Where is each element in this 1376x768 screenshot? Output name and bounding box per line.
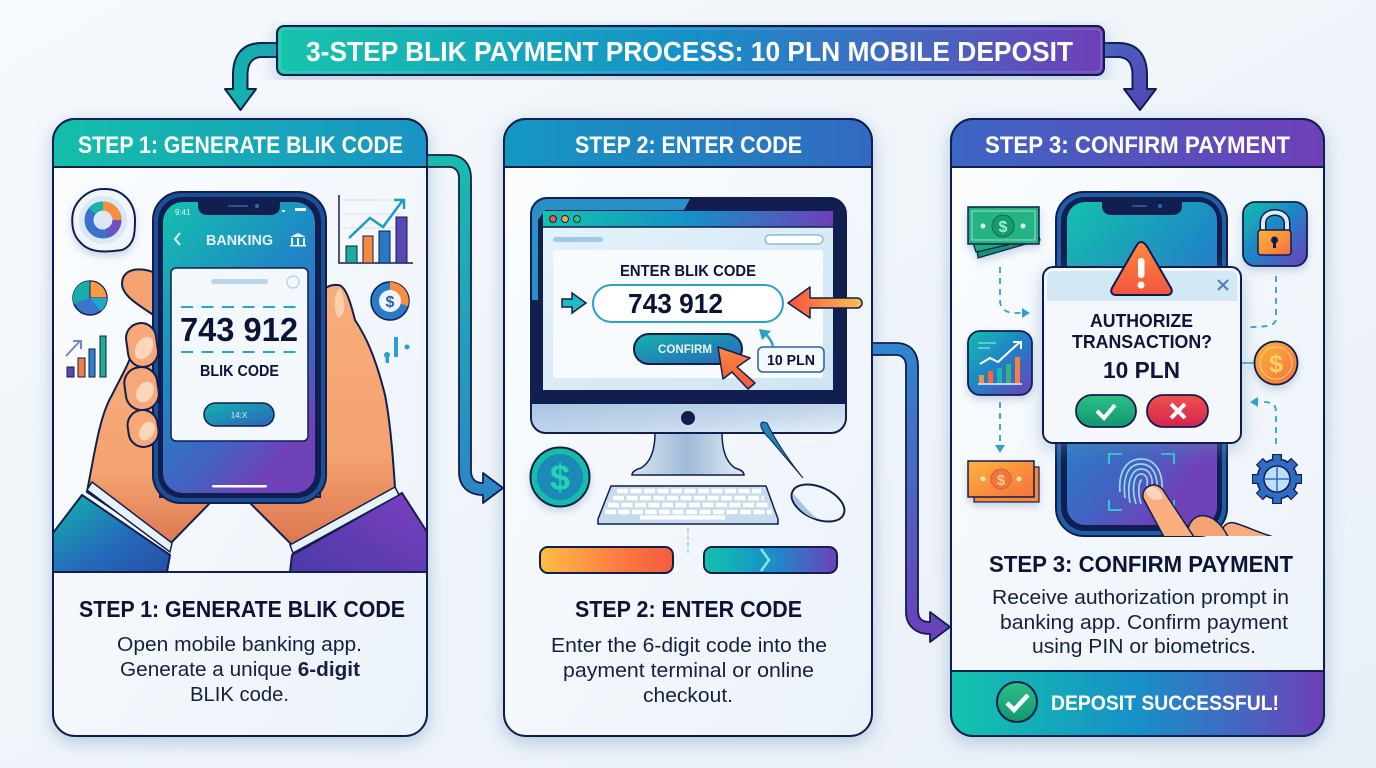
step 2 header: STEP 2: ENTER CODE [575, 132, 802, 159]
keyboard [598, 486, 778, 524]
confirm button [634, 334, 742, 364]
title banner [277, 26, 1104, 75]
step 2 description: Enter the 6-digit code into the [551, 635, 827, 657]
icon: fingerprint [1109, 454, 1174, 510]
arrow: title to step 3 [1100, 43, 1156, 110]
form heading: ENTER BLIK CODE [620, 263, 756, 280]
hand pressing fingerprint [1143, 485, 1274, 537]
step 1 header [53, 119, 427, 167]
cursor [718, 347, 755, 389]
success footer [951, 671, 1324, 736]
approve button [1076, 395, 1136, 427]
fingers on phone edge [122, 321, 161, 449]
icon: green banknotes: $ [999, 219, 1008, 236]
icon: dollar coin [371, 282, 409, 320]
icon: orange banknotes [968, 461, 1039, 502]
icon: small sliders [384, 337, 410, 363]
code field [593, 285, 783, 322]
dashed flow arrows [1000, 267, 1276, 445]
monitor [531, 198, 846, 433]
step 2 description: payment terminal or online [563, 660, 814, 682]
step 1 heading: STEP 1: GENERATE BLIK CODE [79, 596, 405, 622]
arrow: large orange pointer [788, 287, 862, 318]
arrow: step 2 to step 3 [872, 343, 950, 642]
authorization dialog [1043, 242, 1241, 443]
panel divider line [53, 571, 427, 573]
step 1 description: Generate a unique 6-digit [120, 659, 360, 681]
code card: BLIK CODE [200, 363, 279, 380]
monitor stand [632, 433, 744, 475]
phone: banking app: BANKING [206, 233, 273, 249]
panel: step 1 [53, 119, 427, 736]
code card: 14:X [231, 411, 248, 420]
code card: 743 912 [180, 311, 298, 348]
progress bar: orange [540, 547, 673, 573]
icon: orange banknotes: $ [997, 472, 1006, 489]
step 1 description: BLIK code. [190, 684, 289, 706]
title banner: 3-STEP BLIK PAYMENT PROCESS: 10 PLN MOBILE DEPOSIT [306, 36, 1073, 67]
progress bar: gradient with chevron [704, 547, 837, 573]
step 1 description [117, 634, 362, 706]
success footer: DEPOSIT SUCCESSFUL! [1051, 692, 1279, 715]
step 3 heading: STEP 3: CONFIRM PAYMENT [989, 551, 1293, 577]
step 3 description: Receive authorization prompt in [992, 587, 1289, 609]
icon: dollar coin [530, 448, 590, 506]
amount tag: 10 PLN [767, 352, 815, 369]
reject button [1147, 395, 1208, 427]
dashed arrow heads [995, 308, 1258, 453]
arrow: title to step 1 [225, 43, 280, 110]
panel: step 3 [951, 119, 1324, 736]
phone: banking app: 9:41 [175, 208, 191, 217]
arrow: step 1 to step 2 [427, 155, 503, 503]
icon: gold coin [1241, 342, 1298, 384]
left hand and sleeve [53, 269, 210, 572]
phone: banking app [153, 192, 326, 503]
icon: bank [290, 233, 306, 246]
authorization dialog: TRANSACTION? [1072, 332, 1212, 352]
mouse with cable [761, 422, 850, 529]
dialog text: AUTHORIZE [1090, 311, 1193, 331]
step 1 header: STEP 1: GENERATE BLIK CODE [78, 132, 403, 159]
icon: gold coin: $ [1269, 350, 1283, 378]
icon: small rising bars [66, 336, 106, 377]
step 3 description [992, 587, 1289, 658]
arrow: small blue pointer [759, 329, 773, 346]
icon: padlock [1243, 202, 1307, 266]
arrow: small teal pointer [562, 293, 586, 313]
right hand and sleeve [250, 285, 427, 572]
icon: success check [997, 682, 1037, 722]
icon: donut badge [72, 189, 135, 252]
icon: bar chart with trend line [339, 195, 413, 263]
step 2 header [504, 119, 872, 167]
amount tag [758, 347, 824, 372]
confirm button: CONFIRM [658, 342, 712, 356]
icon: dollar coin: $ [386, 294, 395, 311]
step 3 header: STEP 3: CONFIRM PAYMENT [985, 132, 1290, 159]
icon: pie chart [73, 281, 107, 315]
step 2 description: checkout. [643, 685, 733, 707]
code field: 743 912 [628, 288, 723, 319]
dashed connector [687, 528, 689, 553]
icon: warning triangle [1111, 242, 1172, 295]
icon: gear [1252, 454, 1302, 504]
phone: authorization [1056, 192, 1227, 536]
step 3 description: banking app. Confirm payment [1000, 612, 1288, 634]
step 2 description [551, 635, 827, 707]
step 3 header [951, 119, 1324, 167]
icon: green banknotes [968, 207, 1040, 258]
icon: dollar coin: $ [550, 457, 570, 498]
icon: chart card [968, 331, 1032, 395]
panel: step 2 [504, 119, 872, 736]
step 2 heading: STEP 2: ENTER CODE [575, 596, 802, 622]
step 1 description: Open mobile banking app. [117, 634, 362, 656]
step 3 description: using PIN or biometrics. [1032, 636, 1256, 658]
code card [171, 268, 308, 441]
authorization dialog: 10 PLN [1103, 357, 1180, 383]
